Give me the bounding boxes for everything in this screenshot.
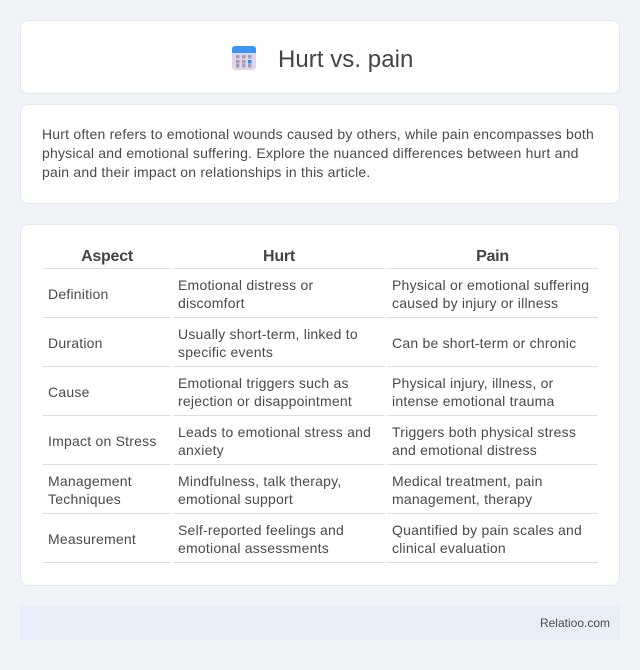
cell: Cause hurt: rejection or disappointment bbox=[178, 393, 352, 409]
row: Management Techniques bbox=[48, 473, 132, 507]
cell: Duration hurt bbox=[178, 326, 358, 360]
panel: comparison table bbox=[20, 224, 620, 586]
cell: Duration pain: Can be short-term or chronic bbox=[392, 335, 576, 351]
text block: introduction: Hurt often refers to emotional wounds caused by others, while pain encompasses both bbox=[42, 126, 594, 142]
cell: Measurement hurt: Self-reported feelings and bbox=[178, 522, 344, 538]
cell: Management hurt: emotional support bbox=[178, 491, 293, 507]
icon: calendar bbox=[232, 46, 256, 70]
cell: Management pain: Medical treatment, pain bbox=[392, 473, 543, 489]
cell: Cause hurt bbox=[178, 375, 352, 409]
title: Hurt vs. pain bbox=[278, 46, 413, 73]
row: Definition: Definition bbox=[48, 286, 109, 302]
cell: Measurement pain bbox=[392, 522, 582, 556]
cell: Management pain bbox=[392, 473, 543, 507]
cell: Measurement hurt: emotional assessments bbox=[178, 540, 329, 556]
row: Impact on Stress: Impact on Stress bbox=[48, 433, 157, 449]
cell: Cause hurt: Emotional triggers such as bbox=[178, 375, 349, 391]
cell: Cause pain bbox=[392, 375, 554, 409]
cell: Impact hurt bbox=[178, 424, 371, 458]
cell: Impact hurt: Leads to emotional stress and bbox=[178, 424, 371, 440]
cell: Definition pain: Physical or emotional suffering bbox=[392, 277, 589, 293]
cell: Definition hurt bbox=[178, 277, 313, 311]
cell: Impact pain: Triggers both physical stress bbox=[392, 424, 576, 440]
heading: Pain: Pain bbox=[476, 248, 509, 265]
cell: Management hurt bbox=[178, 473, 341, 507]
row: Measurement: Measurement bbox=[48, 531, 136, 547]
cell: Impact pain bbox=[392, 424, 576, 458]
heading: Aspect: Aspect bbox=[81, 248, 133, 265]
text block: introduction: pain and their impact on relationships in this article. bbox=[42, 164, 371, 180]
row: Cause: Cause bbox=[48, 384, 90, 400]
cell: Management pain: management, therapy bbox=[392, 491, 532, 507]
cell: Impact hurt: anxiety bbox=[178, 442, 224, 458]
cell: Management hurt: Mindfulness, talk therapy, bbox=[178, 473, 341, 489]
cell: Definition pain bbox=[392, 277, 589, 311]
row: Duration: Duration bbox=[48, 335, 103, 351]
cell: Cause pain: intense emotional trauma bbox=[392, 393, 554, 409]
text block: introduction bbox=[42, 126, 594, 180]
text block: introduction: physical and emotional suffering. Explore the nuanced differences between hurt and bbox=[42, 145, 579, 161]
cell: Measurement pain: Quantified by pain scales and bbox=[392, 522, 582, 538]
panel: introduction bbox=[20, 104, 620, 204]
heading: Hurt: Hurt bbox=[263, 248, 295, 265]
cell: Measurement pain: clinical evaluation bbox=[392, 540, 506, 556]
footer: site name: Relatioo.com bbox=[540, 616, 610, 630]
cell: Impact pain: and emotional distress bbox=[392, 442, 537, 458]
cell: Duration hurt: specific events bbox=[178, 344, 273, 360]
cell: Definition pain: caused by injury or illness bbox=[392, 295, 558, 311]
cell: Definition hurt: discomfort bbox=[178, 295, 245, 311]
cell: Duration hurt: Usually short-term, linked to bbox=[178, 326, 358, 342]
row: Management Techniques: Management bbox=[48, 473, 132, 489]
panel: title card bbox=[20, 20, 620, 94]
row: Management Techniques: Techniques bbox=[48, 491, 121, 507]
cell: Measurement hurt bbox=[178, 522, 344, 556]
cell: Cause pain: Physical injury, illness, or bbox=[392, 375, 554, 391]
cell: Definition hurt: Emotional distress or bbox=[178, 277, 313, 293]
footer bbox=[20, 606, 620, 640]
